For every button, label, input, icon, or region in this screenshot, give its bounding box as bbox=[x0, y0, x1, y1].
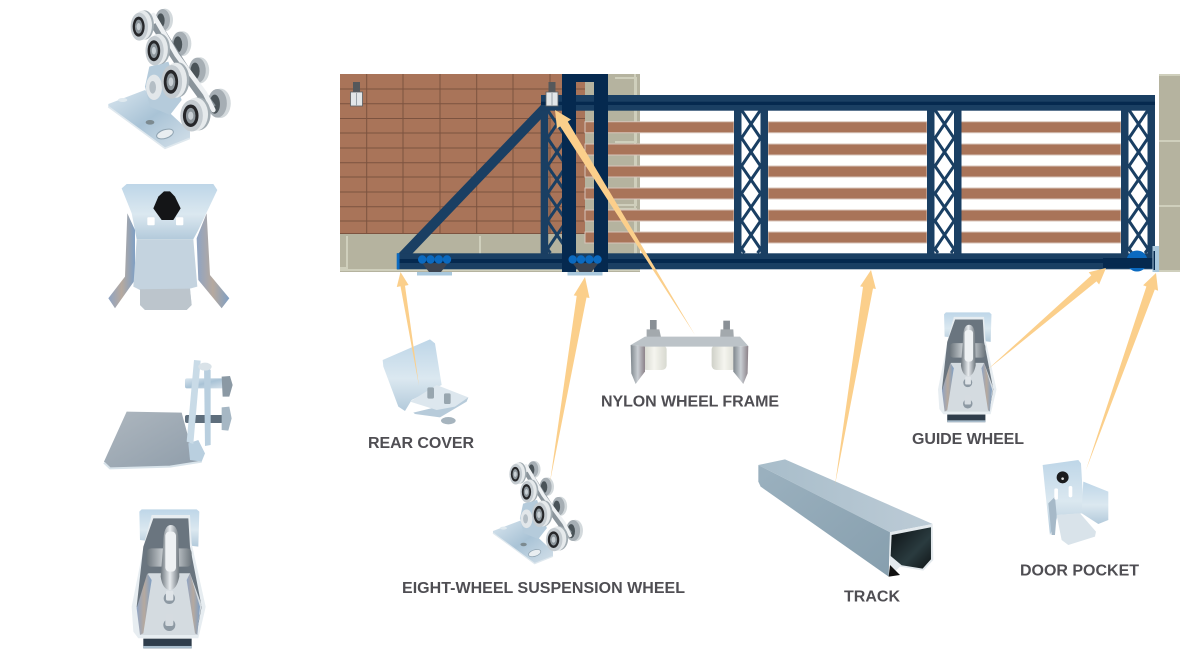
text: rear cover: REAR COVER bbox=[368, 435, 474, 452]
group: door pocket bbox=[1020, 460, 1139, 580]
group: nylon wheel frame bbox=[601, 320, 779, 410]
group: track bbox=[758, 459, 933, 606]
product: guide wheel bbox=[938, 312, 996, 422]
text: nylon wheel frame: NYLON WHEEL FRAME bbox=[601, 394, 779, 410]
horizontal slats bbox=[585, 122, 1121, 243]
gate diagram bbox=[340, 74, 1180, 276]
text: door pocket: DOOR POCKET bbox=[1020, 562, 1139, 580]
left product: door pocket bracket bbox=[108, 184, 229, 310]
rear cover marker bbox=[397, 253, 400, 269]
arrow: track bbox=[835, 270, 876, 485]
nylon wheel frame on wall bbox=[350, 82, 362, 106]
product: rear cover bbox=[383, 339, 468, 424]
right stone pier bbox=[1159, 74, 1180, 272]
arrow: guide wheel bbox=[987, 268, 1106, 370]
arrow: door pocket bbox=[1086, 273, 1158, 470]
nylon wheel frame on post bbox=[546, 82, 558, 106]
guide wheel marker bbox=[1103, 250, 1155, 272]
product: eight-wheel suspension wheel bbox=[493, 461, 583, 564]
front roller carriage bbox=[568, 255, 602, 276]
lattice columns bbox=[541, 105, 1155, 255]
group: eight-wheel suspension wheel bbox=[402, 461, 685, 597]
left product: eight-wheel carriage bbox=[108, 9, 231, 148]
diagonal brace bbox=[398, 104, 542, 254]
rear roller carriage bbox=[417, 255, 452, 276]
arrow: rear cover bbox=[397, 272, 419, 386]
stone base and pier bbox=[340, 74, 640, 272]
arrow: nylon wheel frame bbox=[555, 110, 695, 335]
left product: side bracket with bolts bbox=[104, 360, 233, 468]
top rail bbox=[541, 95, 1155, 111]
arrow: eight-wheel suspension wheel bbox=[550, 277, 590, 482]
product: track bbox=[758, 459, 933, 577]
text: guide wheel: GUIDE WHEEL bbox=[912, 431, 1024, 448]
dark vertical posts bbox=[562, 74, 608, 272]
group: rear cover bbox=[368, 339, 474, 452]
brick wall bbox=[340, 74, 585, 234]
text: eight-wheel suspension wheel: EIGHT-WHEEL SUSPENSION WHEEL bbox=[402, 580, 685, 597]
left product: guide wheel bbox=[132, 509, 206, 648]
door pocket marker bbox=[1152, 246, 1159, 272]
bottom rail bbox=[397, 253, 1155, 269]
group: guide wheel bbox=[912, 312, 1024, 448]
text: track: TRACK bbox=[844, 588, 900, 606]
product: door pocket bbox=[1043, 460, 1108, 545]
product: nylon wheel frame bbox=[631, 320, 748, 384]
